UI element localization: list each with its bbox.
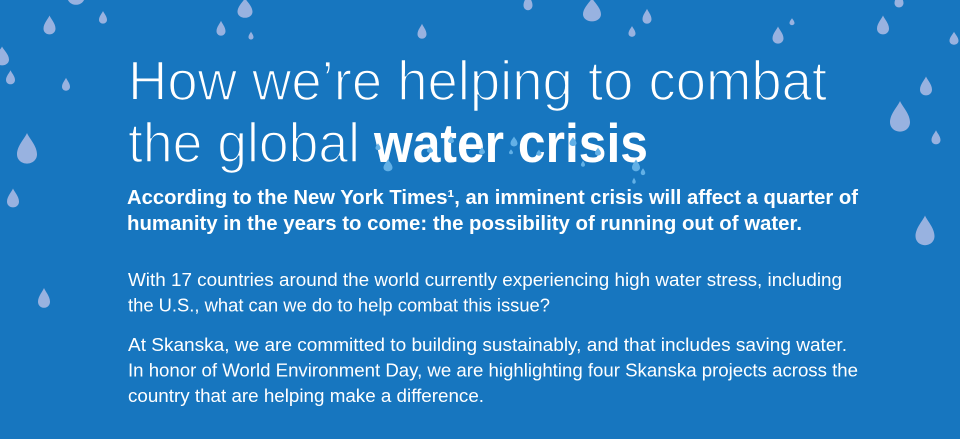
title water drips [376,136,645,184]
subheading: According to the New York Times¹, an imminent crisis will affect a quarter of [127,187,858,209]
body paragraph 2: In honor of World Environment Day, we are highlighting four Skanska projects across the [128,360,858,380]
subheading: humanity in the years to come: the possibility of running out of water. [127,213,802,235]
body paragraph 2: country that are helping make a difference. [128,386,484,406]
raindrops [0,0,958,308]
body paragraph 1 [128,270,842,316]
body paragraph 1: the U.S., what can we do to help combat this issue? [128,296,550,316]
title: How we’re helping to combat [128,49,827,112]
subheading [127,187,858,235]
title: water crisis [373,112,648,174]
title [128,49,827,174]
body paragraph 2 [128,335,858,406]
body paragraph 2: At Skanska, we are committed to building sustainably, and that includes saving water. [128,335,847,355]
body paragraph 1: With 17 countries around the world currently experiencing high water stress, including [128,270,842,290]
title: the global [128,111,360,174]
